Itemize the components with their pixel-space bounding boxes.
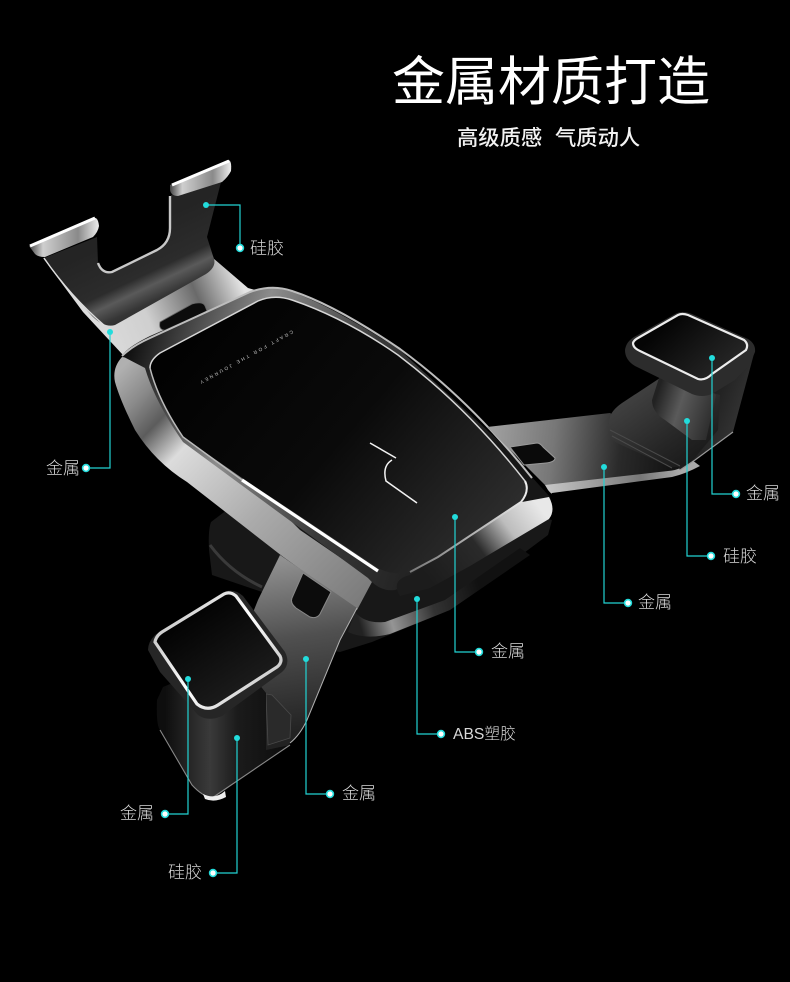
black glass panel bbox=[150, 297, 527, 573]
lower holder: cap bbox=[148, 591, 287, 719]
callout: ABS plastic bbox=[414, 596, 516, 743]
rear dark base bbox=[209, 480, 552, 652]
callout: metal right arm: 金属 bbox=[638, 593, 672, 612]
subtitle: 高级质感 bbox=[457, 126, 542, 150]
subtitle: 气质动人 bbox=[555, 126, 640, 150]
callout: metal right cap: 金属 bbox=[746, 484, 780, 503]
right arm: window bbox=[510, 443, 555, 465]
panel logo bbox=[370, 443, 417, 503]
callout: metal top clip bbox=[46, 329, 113, 478]
callout: metal lower arm bbox=[303, 656, 376, 803]
callout: metal lower cap bbox=[120, 676, 191, 823]
metal tail under head bbox=[348, 548, 530, 637]
right holder: stem bbox=[652, 378, 716, 440]
callout: silicone lower holder bbox=[168, 735, 240, 882]
right holder: cap bbox=[625, 312, 755, 396]
callout: silicone lower holder: 硅胶 bbox=[168, 863, 202, 882]
holder head: silver band bbox=[114, 357, 373, 610]
callout: silicone top clip bbox=[203, 202, 284, 258]
callout: metal top clip: 金属 bbox=[46, 459, 80, 478]
callout: metal right arm bbox=[601, 464, 672, 612]
lower arm: window bbox=[292, 573, 331, 618]
right holder: base bbox=[608, 378, 720, 467]
rim highlight: panel edges bbox=[150, 297, 527, 572]
callout: ABS plastic: ABS塑胶 bbox=[453, 725, 516, 743]
callout: metal panel bbox=[452, 514, 525, 661]
callout: metal lower arm: 金属 bbox=[342, 784, 376, 803]
title: 金属材质打造 bbox=[392, 53, 710, 112]
callout: metal panel: 金属 bbox=[491, 642, 525, 661]
lower arm: metal plate bbox=[250, 555, 357, 760]
lower holder: body bbox=[157, 660, 290, 797]
top clip: silicone cover bbox=[44, 182, 221, 326]
right holder: cap ring bbox=[633, 314, 747, 379]
lower holder: side bracket bbox=[266, 694, 291, 745]
callout: silicone right holder bbox=[684, 418, 757, 566]
top clip: left metal tip bbox=[29, 218, 99, 257]
holder head: top rim bbox=[122, 288, 552, 590]
top clip: metal plate bbox=[43, 258, 262, 355]
top clip: right metal tip bbox=[170, 160, 231, 196]
lower holder: cap ring bbox=[155, 593, 281, 708]
right arm: metal plate bbox=[487, 413, 695, 490]
lower holder: foot highlight bbox=[203, 791, 226, 801]
callout: silicone top clip: 硅胶 bbox=[250, 239, 284, 258]
callout: metal lower cap: 金属 bbox=[120, 804, 154, 823]
callout: silicone right holder: 硅胶 bbox=[723, 547, 757, 566]
rim highlight: top bbox=[122, 288, 532, 478]
callout: metal right cap bbox=[709, 355, 780, 503]
product: car phone holder bbox=[29, 160, 755, 801]
top clip: slot bbox=[160, 303, 207, 330]
panel tiny text: CRAFT FOR THE JOURNEY bbox=[197, 328, 294, 386]
right holder: rear bracket bbox=[660, 350, 755, 470]
